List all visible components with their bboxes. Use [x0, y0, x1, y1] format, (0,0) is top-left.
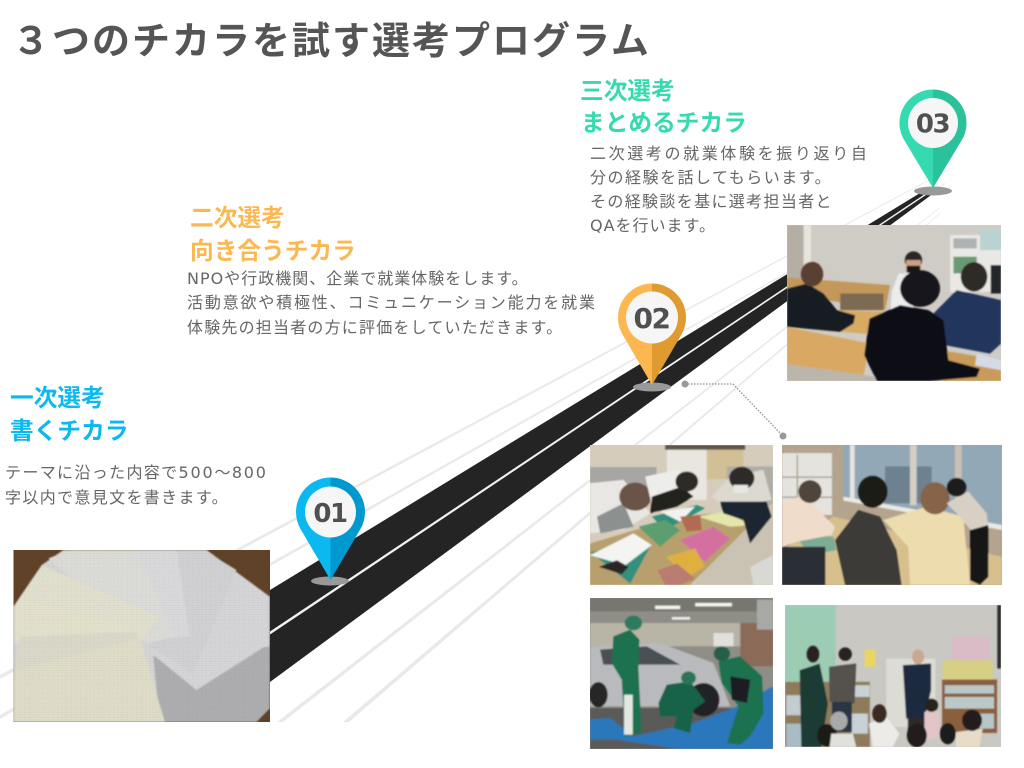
pin 03 [899, 90, 967, 196]
stage 2 heading: 二次選考 [190, 205, 285, 232]
stage 1 heading: 一次選考 [10, 385, 105, 412]
stage 1 heading [10, 385, 128, 445]
stage 3 description: QAを行います。 [590, 216, 716, 235]
photo: mechanics at a car [590, 598, 773, 749]
pin 03: 03 [916, 110, 949, 140]
stage 3 description: 分の経験を話してもらいます。 [590, 169, 832, 187]
stage 1 description: テーマに沿った内容で500〜800 [5, 463, 268, 482]
stage 3 heading: まとめるチカラ [581, 111, 747, 137]
stage 2 heading: 向き合うチカラ [190, 238, 356, 265]
pin 01: 01 [313, 499, 347, 529]
road [270, 190, 938, 682]
stage 3 heading [580, 78, 747, 137]
stage 2 description: 活動意欲や積極性、コミュニケーション能力を就業 [187, 294, 597, 312]
connector: stop 2 to photos [682, 380, 786, 440]
photo: essay sheets [14, 550, 270, 722]
pin 01 [296, 478, 365, 586]
stage 3 description [590, 145, 869, 235]
stage 3 description: その経験談を基に選考担当者と [590, 193, 833, 211]
photo: workplace meeting [782, 445, 1002, 585]
photo: library talk [785, 605, 1001, 747]
photo: students drawing at a table [590, 445, 773, 585]
stage 1 heading: 書くチカラ [10, 418, 128, 445]
pin 02: 02 [634, 302, 669, 335]
pin 02 [618, 284, 686, 392]
title: ３つのチカラを試す選考プログラム [12, 10, 651, 65]
stage 2 description: NPOや行政機関、企業で就業体験をします。 [187, 269, 529, 288]
photo: interview [787, 225, 1001, 381]
stage 1 description [5, 463, 268, 507]
stage 3 heading: 三次選考 [580, 78, 675, 105]
perspective guide lines [0, 171, 945, 722]
stage 2 description: 体験先の担当者の方に評価をしていただきます。 [187, 319, 563, 337]
stage 1 description: 字以内で意見文を書きます。 [5, 489, 229, 507]
stage 2 description [187, 269, 597, 337]
stage 3 description: 二次選考の就業体験を振り返り自 [590, 145, 869, 163]
stage 2 heading [190, 205, 356, 265]
